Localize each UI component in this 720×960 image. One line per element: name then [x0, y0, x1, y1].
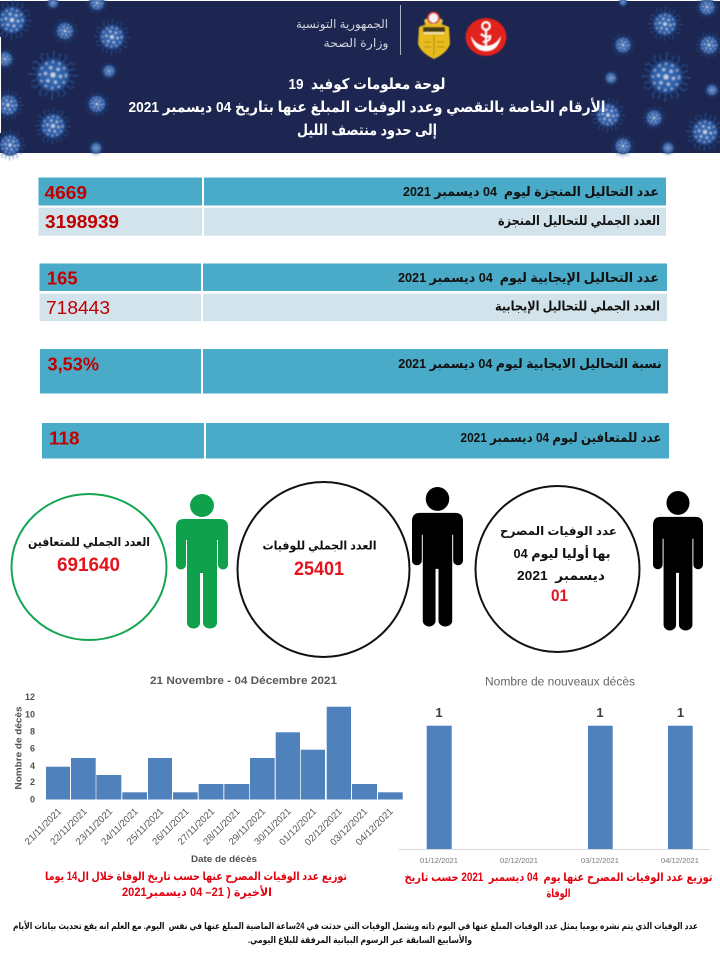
- date labels: 29/11/2021: [227, 806, 268, 848]
- row: total tests: 3198939: [45, 212, 119, 232]
- footnote: والأسابيع السابقة عبر الرسوم البيانية المرفقة للبلاغ اليومي.: [248, 934, 472, 946]
- row: tests done on the day: عدد التحاليل المنجزة ليوم 04 ديسمبر 2021: [403, 184, 659, 200]
- y axis labels: 10: [25, 710, 35, 720]
- value labels: 1: [435, 705, 443, 720]
- row: tests done on the day: [38, 178, 666, 206]
- y axis labels: [25, 692, 35, 804]
- row: total positive tests: 718443: [46, 298, 110, 318]
- y axis labels: 6: [30, 744, 35, 754]
- caption: deaths declared on the day by date: الوفاة: [546, 888, 570, 901]
- row: positive tests on the day: عدد التحاليل الإيجابية ليوم 04 ديسمبر 2021: [398, 270, 659, 286]
- y axis title: Nombre de décès: [14, 706, 24, 790]
- icon: green person: [176, 494, 228, 628]
- date labels: 04/12/2021: [354, 806, 396, 848]
- date labels: 28/11/2021: [201, 806, 243, 848]
- ministry name: وزارة الصحة: [324, 36, 388, 51]
- panel: total deaths: [238, 482, 410, 657]
- row: total positive tests: [40, 294, 667, 321]
- title: الأرقام الخاصة بالتقصي وعدد الوفيات المبلغ عنها بتاريخ 04 ديسمبر 2021: [128, 98, 606, 116]
- date labels: 27/11/2021: [176, 806, 217, 848]
- row: recoveries on the day: 118: [49, 428, 80, 448]
- date labels: 04/12/2021: [661, 856, 699, 865]
- axis line: [399, 849, 710, 850]
- icon: black person: [653, 491, 703, 630]
- title: لوحة معلومات كوفيد 19: [288, 76, 446, 93]
- panel: deaths declared on the day: 01: [551, 586, 568, 605]
- row: total positive tests: العدد الجملي للتحاليل الإيجابية: [495, 298, 660, 314]
- date labels: 22/11/2021: [48, 806, 90, 848]
- row: total tests: العدد الجملي للتحاليل المنجزة: [498, 213, 660, 228]
- caption: 14-day distribution: الأخيرة ( 21– 04 ديسمبر2021: [122, 885, 272, 899]
- date labels: 01/12/2021: [277, 806, 319, 848]
- icon: tunisian coat of arms: [418, 12, 450, 59]
- row: positive tests on the day: [40, 264, 667, 291]
- x axis title: Date de décès: [191, 854, 257, 864]
- bars: [427, 726, 693, 849]
- panel: statistics rows: [38, 178, 669, 458]
- virus illustrations: [0, 0, 720, 160]
- ministry name: الجمهورية التونسية: [296, 17, 388, 32]
- date labels: 30/11/2021: [252, 806, 294, 848]
- panel: total deaths: 25401: [294, 559, 344, 580]
- row: recoveries on the day: [42, 423, 669, 458]
- value labels: 1: [677, 705, 684, 720]
- date labels: [23, 806, 396, 848]
- circle: [12, 494, 166, 640]
- row: tests done on the day: 4669: [44, 183, 87, 203]
- panel: total recoveries: العدد الجملي للمتعافين: [28, 535, 150, 549]
- panel: total recoveries: [12, 494, 166, 640]
- row: positivity rate: 3,53%: [48, 354, 99, 374]
- title: إلى حدود منتصف الليل: [297, 122, 437, 139]
- y axis labels: 4: [30, 761, 35, 771]
- date labels: 02/12/2021: [500, 856, 538, 865]
- row: total tests: [38, 208, 666, 236]
- y axis labels: 0: [30, 794, 35, 804]
- value labels: [435, 705, 684, 720]
- y axis labels: 8: [30, 726, 35, 736]
- icon: red crescent health logo: [466, 18, 506, 56]
- chart: deaths by date of death: [14, 675, 403, 864]
- date labels: 25/11/2021: [125, 806, 166, 848]
- caption: 14-day distribution: توزيع عدد الوفيات المصرح عنها حسب تاريخ الوفاة خلال ال14 يوما: [45, 871, 347, 884]
- date labels: 01/12/2021: [420, 856, 458, 865]
- row: positivity rate: نسبة التحاليل الايجابية ليوم 04 ديسمبر 2021: [398, 356, 662, 372]
- ministry name: [296, 17, 388, 51]
- date labels: [420, 856, 699, 865]
- panel: total recoveries: 691640: [57, 555, 120, 576]
- footnote: [13, 920, 698, 946]
- panel: total deaths: العدد الجملي للوفيات: [262, 538, 376, 554]
- panel: deaths declared on the day: ديسمبر 2021: [517, 568, 605, 583]
- date labels: 24/11/2021: [99, 806, 141, 848]
- header banner: [0, 0, 720, 160]
- date labels: 21/11/2021: [23, 806, 64, 848]
- y axis labels: 2: [30, 777, 35, 787]
- date labels: 03/12/2021: [328, 806, 370, 848]
- date labels: 03/12/2021: [581, 856, 619, 865]
- chart title: 21 Novembre - 04 Décembre 2021: [150, 675, 337, 687]
- date labels: 02/12/2021: [303, 806, 345, 848]
- panel: deaths declared on the day: [476, 486, 640, 652]
- chart title: Nombre de nouveaux décès: [485, 676, 635, 688]
- value labels: 1: [596, 705, 604, 720]
- caption: deaths declared on the day by date: [404, 872, 712, 901]
- title: [128, 76, 606, 139]
- bars: [46, 707, 403, 800]
- date labels: 23/11/2021: [74, 806, 115, 848]
- date labels: 26/11/2021: [150, 806, 192, 848]
- y axis labels: 12: [25, 692, 35, 702]
- row: recoveries on the day: عدد للمتعافين ليوم 04 ديسمبر 2021: [460, 430, 662, 446]
- caption: 14-day distribution: [45, 871, 347, 899]
- row: positive tests on the day: 165: [47, 268, 78, 288]
- icon: black person: [412, 487, 463, 626]
- panel: deaths declared on the day: عدد الوفيات المصرح: [500, 524, 617, 539]
- row: positivity rate: [40, 349, 668, 394]
- panel: deaths declared on the day: بها أوليا ليوم 04: [514, 545, 610, 562]
- chart: new deaths: [399, 676, 710, 865]
